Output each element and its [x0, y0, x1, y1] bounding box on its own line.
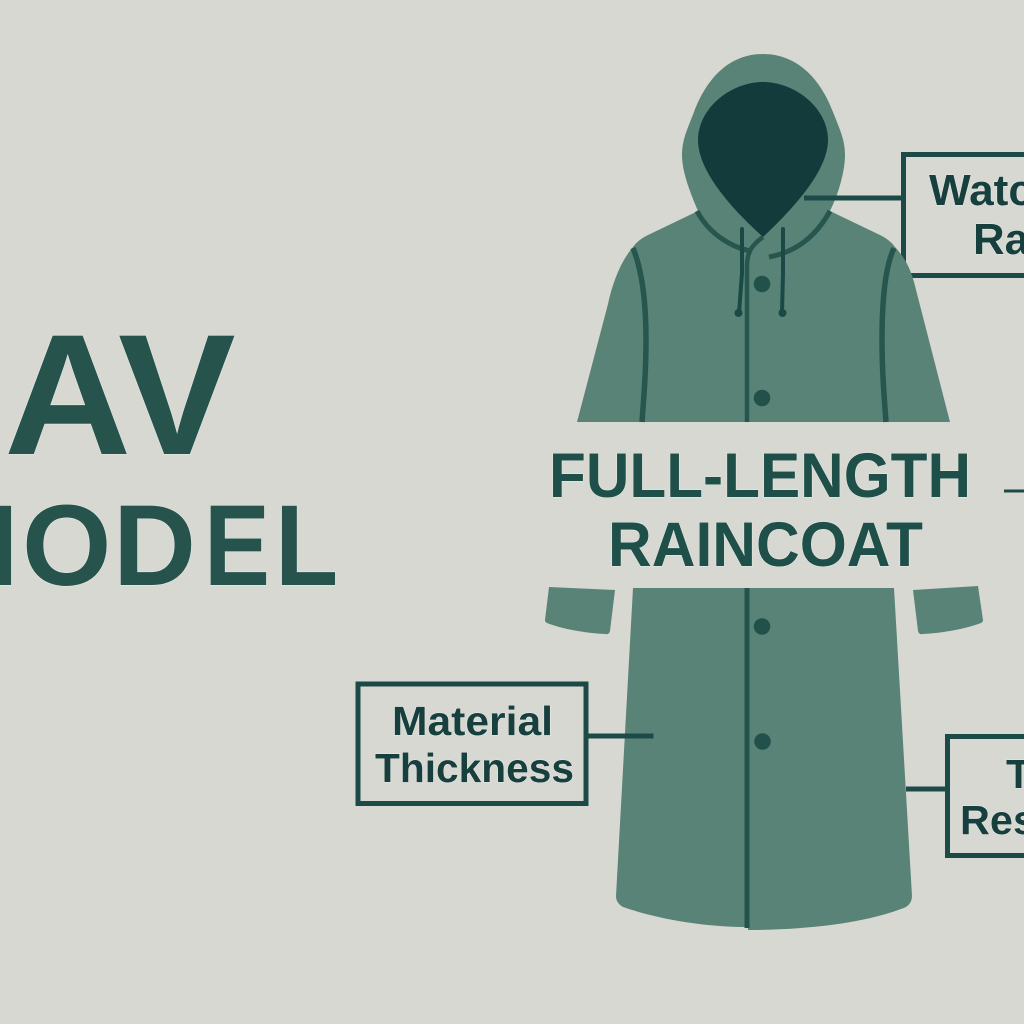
title: AV model: A [4, 298, 131, 491]
left cuff [545, 587, 615, 634]
connector: right middle [1004, 490, 1024, 492]
heading: full-length raincoat [549, 441, 971, 580]
title: AV model: L [275, 482, 338, 610]
raincoat upper body [577, 54, 950, 422]
callout: material thickness: Material [392, 698, 553, 744]
callout: material thickness: Thickness [375, 745, 574, 791]
raincoat lower body [616, 588, 912, 930]
callout: material thickness [358, 684, 654, 804]
buttons [754, 276, 770, 292]
title: AV model: V [118, 298, 236, 491]
heading: full-length raincoat: FULL-LENGTH [549, 441, 971, 511]
title: AV model: O [22, 482, 111, 610]
title: AV model: D [113, 482, 196, 610]
callout box: water resistance [904, 154, 1024, 276]
seams [633, 211, 894, 422]
hood [682, 54, 845, 258]
title: AV model [0, 298, 338, 610]
coat shoulders and sleeves [577, 211, 950, 422]
connector: hood to water resistance box [804, 196, 903, 200]
hood opening [698, 82, 828, 237]
title: AV model: E [204, 481, 270, 610]
drawstrings [739, 229, 783, 313]
heading: full-length raincoat: RAINCOAT [608, 510, 923, 580]
callout: tear resistance [906, 736, 1024, 856]
right cuff [913, 586, 983, 634]
